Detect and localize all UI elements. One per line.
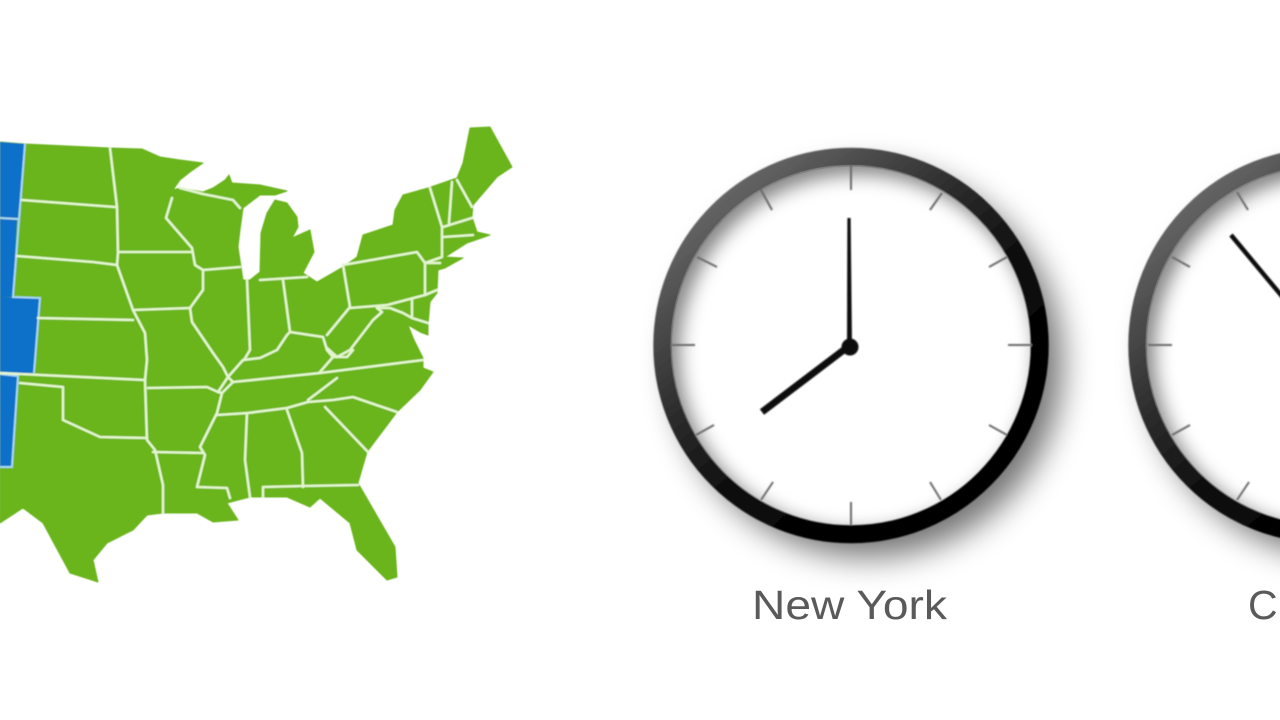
second clock ring (1137, 157, 1280, 534)
Colorado (0, 297, 40, 373)
minute hand (847, 218, 852, 346)
clock: New York (662, 157, 1062, 557)
second clock body (1137, 157, 1280, 534)
blue states (0, 142, 40, 467)
Montana (0, 142, 25, 218)
second clock face (1145, 164, 1280, 526)
infographic canvas (0, 126, 1280, 620)
clock body (662, 157, 1040, 534)
clock hub (842, 338, 858, 356)
New Mexico (0, 375, 18, 467)
label: New York: New York (752, 582, 948, 628)
hour ticks (672, 165, 1032, 525)
clock shadow (674, 169, 1062, 557)
Wyoming (0, 219, 17, 297)
hour hand (762, 346, 849, 412)
second clock hand (1231, 235, 1280, 348)
clock: Chicago (1137, 157, 1280, 557)
clock ring (662, 157, 1040, 534)
state borders (0, 148, 473, 513)
second clock ticks (1148, 192, 1249, 500)
green land area (0, 127, 512, 582)
clock face (670, 164, 1032, 526)
second clock shadow (1149, 169, 1280, 557)
US map (0, 127, 512, 582)
